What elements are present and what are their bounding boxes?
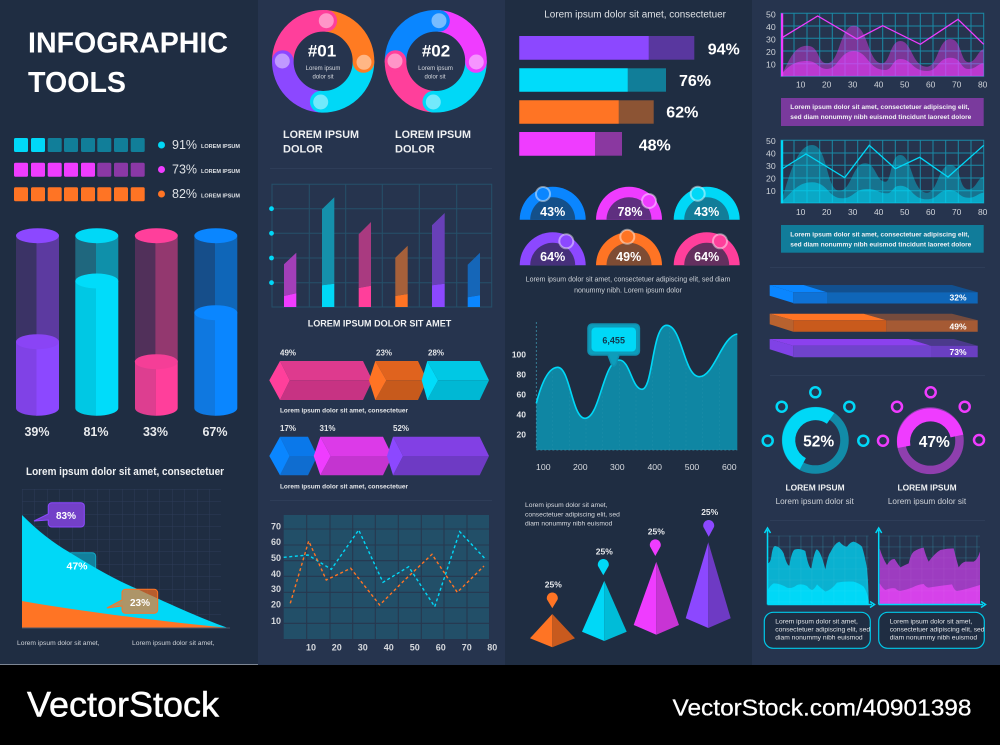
y labels: 30 [766,161,776,171]
panel: donut 52% [763,387,868,506]
pyramid purple: 25% [701,507,719,517]
ring captions: LOREM IPSUM [283,129,359,141]
x labels: 30 [848,80,858,90]
gauge orange 49% [596,230,662,265]
y labels [766,10,776,70]
panel: cyan line chart [766,136,988,217]
orange segment [369,361,427,400]
line [781,16,984,44]
y axis labels: 50 [271,553,281,563]
title: INFOGRAPHIC [28,28,228,60]
back area [781,26,984,76]
cylinder 81%: 81% [83,425,109,439]
bar 48% [519,132,671,156]
x axis labels: 200 [573,462,588,472]
text block: pyramids: consectetuer adipiscing elit, sed [525,511,620,518]
bar 6 [468,253,480,307]
caption: Lorem ipsum dolor sit amet, consectetuer [280,484,409,490]
panel: donut 52%: 52% [803,434,834,451]
gauge cyan 43% [674,187,740,220]
callout 23% [107,589,158,613]
purple segment [387,437,489,475]
banner: teal: sed diam nonummy nibh euismod tincidunt laoreet dolore [790,242,972,248]
gauge caption: Lorem ipsum dolor sit amet, consectetuer adipiscing elit, sed diam [526,277,730,284]
bar 2 [322,197,334,307]
y axis labels: 40 [517,410,526,420]
x labels: 80 [978,80,988,90]
row 91% [14,138,240,152]
callout: left text box: consectetuer adipiscing elit, sed [775,626,870,634]
bar 48%: 48% [639,138,671,155]
cylinder 81% [75,228,118,439]
y labels: 50 [766,10,776,20]
x labels: 60 [926,207,936,217]
x labels: 30 [848,207,858,217]
cylinder 67%: 67% [202,425,228,439]
pink segment [269,361,372,400]
magenta segment [314,437,392,475]
callout: right text box: diam nonummy nibh euismod [890,635,977,642]
caption: Lorem ipsum dolor sit amet, consectetuer [280,408,409,415]
title [28,28,228,99]
x axis labels: 20 [332,643,342,653]
panel: dotted line chart [271,515,497,653]
text block: pyramids [525,502,620,528]
pyramid orange: 25% [545,579,562,589]
panel: square progress rows [14,138,240,201]
banner: purple: sed diam nonummy nibh euismod tincidunt laoreet dolore [790,114,972,121]
row 91%: LOREM IPSUM [201,144,240,150]
panel: hex bars row 2: 52% [393,424,409,433]
pyramid magenta: 25% [648,527,665,537]
y labels: 30 [766,34,776,44]
cylinder 67% [194,228,237,439]
panel: 3D bars [770,285,978,357]
bar blue 32% [770,285,978,304]
pyramid cyan: 25% [596,546,613,556]
x labels: 40 [874,207,884,217]
banner: teal [781,225,984,253]
bar 62%: 62% [666,104,698,121]
gauge blue 43%: 43% [540,205,565,219]
x labels: 80 [978,207,988,217]
y axis labels: 10 [271,616,281,626]
orange area [22,601,228,628]
bar purple 73%: 73% [949,347,967,357]
panel: hex bars row 2 [269,424,489,490]
bar blue 32%: 32% [949,293,967,303]
ring captions [283,129,471,156]
x labels: 10 [796,207,806,217]
callout: left text box [764,612,870,648]
row 73% [14,162,240,177]
x labels: 60 [926,80,936,90]
footnotes: Lorem ipsum dolor sit amet, [17,640,100,647]
panel: pyramids [530,507,731,647]
bar 76% [519,68,711,92]
row 82%: 82% [172,187,197,201]
gauge caption: nonummy nibh. Lorem ipsum dolor [574,288,683,295]
x labels: 70 [952,207,962,217]
callout: left text box: diam nonummy nibh euismod [775,635,863,642]
gauge caption [526,277,730,295]
gauge purple 64%: 64% [540,250,565,264]
bar 1 [284,253,296,307]
x labels: 50 [900,207,910,217]
panel: ring #01: #01 [308,42,336,61]
ring captions: LOREM IPSUM [395,129,471,141]
panel: curve area chart [512,320,737,472]
value callout: 6,455 [602,336,625,346]
bar orange 49%: 49% [949,321,967,331]
y axis labels: 40 [271,569,281,579]
row 82%: LOREM IPSUM [201,193,240,199]
banner: purple: Lorem ipsum dolor sit amet, consectetuer adipiscing elit, [790,104,969,111]
y axis labels: 30 [271,584,281,594]
bar 76%: 76% [679,73,711,90]
panel: donut 47%: LOREM IPSUM [897,483,957,493]
panel: ring #02: dolor sit [424,74,446,80]
footer: image id: VectorStock.com/40901398 [672,695,972,721]
callout 23%: 23% [130,598,150,609]
panel: ring #01: dolor sit [312,74,334,80]
bar purple 73% [770,339,978,357]
footer: brand: VectorStock [27,686,220,725]
ring captions: DOLOR [283,144,323,156]
bar 62% [519,100,698,124]
value callout [588,324,639,366]
x axis labels: 30 [358,643,368,653]
row 91%: 91% [172,138,197,152]
y axis labels: 80 [517,370,526,380]
gauge magenta 78% [596,187,662,220]
x axis labels: 10 [306,643,316,653]
callout: right text box [879,612,985,648]
y labels: 10 [766,186,776,196]
y labels: 20 [766,174,776,184]
callout 47% background [68,553,96,579]
y axis labels: 20 [517,430,526,440]
back area [782,145,984,203]
x axis labels: 60 [436,643,446,653]
x labels: 70 [952,80,962,90]
gauge pink 64% [674,232,740,265]
panel: ring #01 [272,10,374,112]
panel: ring #02: Lorem ipsum [418,66,453,72]
y axis labels: 100 [512,350,526,360]
panel: horizontal bars [519,36,740,156]
panel: ring #02 [385,10,487,112]
gauge cyan 43%: 43% [694,205,719,219]
banner: teal: Lorem ipsum dolor sit amet, consectetuer adipiscing elit, [790,232,969,238]
pyramid cyan [582,546,627,641]
gauge purple 64% [520,232,586,265]
y labels: 40 [766,22,776,32]
callout 83% [34,503,84,527]
orange dotted line [290,541,484,605]
pyramid purple [686,507,731,628]
bar 94%: 94% [708,41,740,58]
cylinder 33%: 33% [143,425,168,439]
y axis labels [512,350,526,440]
chart grid [22,489,221,628]
panel: hex bars row 1: 23% [376,348,392,357]
heading: Lorem ipsum dolor sit amet, consectetuer [26,466,224,478]
y labels: 50 [766,136,776,146]
x labels [796,80,988,90]
panel: donut 52%: LOREM IPSUM [785,483,845,493]
panel: hex bars row 2: 17% [280,424,296,433]
panel: magenta line chart [766,10,988,90]
panel: donut 47%: Lorem ipsum dolor sit [888,497,967,506]
x labels: 20 [822,207,832,217]
front area [781,51,984,76]
callout 83%: 83% [56,511,76,522]
x axis labels: 500 [685,462,699,472]
y labels [766,136,776,196]
x labels: 10 [796,80,806,90]
label 47%: 47% [66,560,88,572]
gauge magenta 78%: 78% [617,205,643,219]
y axis labels: 70 [271,522,281,532]
pyramid orange [530,579,575,647]
panel: hex bars row 2: 31% [320,424,336,433]
gauge orange 49%: 49% [616,250,641,264]
banner: purple [781,98,984,126]
panel: hex bars row 1: 49% [280,348,296,357]
cylinder 39%: 39% [24,425,50,439]
panel: small magenta area chart [876,528,986,608]
x axis labels: 100 [536,462,551,472]
panel: hex bars row 1: 28% [428,348,444,357]
cyan segment [422,361,489,400]
x axis labels: 80 [487,643,497,653]
footnotes [17,640,215,647]
x axis labels [306,643,497,653]
row 73%: 73% [172,162,197,176]
panel: hex bars row 1 [269,348,489,415]
axis dots [269,206,274,285]
text block: pyramids: diam nonummy nibh euismod [525,521,613,528]
callout: right text box: Lorem ipsum dolor sit amet, [890,618,972,625]
x labels: 40 [874,80,884,90]
x axis labels: 70 [462,643,472,653]
panel: half gauges [520,187,740,295]
bar 3 [359,222,371,307]
text block: pyramids: Lorem ipsum dolor sit amet, [525,502,608,509]
y labels: 40 [766,149,776,159]
x axis labels: 40 [384,643,394,653]
x labels [796,207,988,217]
panel: cylinder chart [16,228,237,439]
y labels: 20 [766,47,776,57]
callout: left text box: Lorem ipsum dolor sit amet, [775,618,858,625]
bar 94% [519,36,740,60]
x axis labels: 600 [722,462,737,472]
x axis labels: 400 [647,462,662,472]
footnotes: Lorem ipsum dolor sit amet, [132,640,215,647]
panel: triangle area chart [17,466,230,647]
y axis labels [271,522,281,626]
cylinder 33% [135,228,178,439]
line [782,145,984,178]
caption: LOREM IPSUM DOLOR SIT AMET [308,318,452,328]
bar orange 49% [770,314,978,332]
callout: right text box: consectetuer adipiscing elit, sed [890,626,985,634]
y axis labels: 60 [517,390,526,400]
bar 5 [432,213,445,307]
panel: donut 47%: 47% [919,434,950,451]
title: TOOLS [28,67,126,99]
panel: slanted bar chart [269,184,492,328]
x axis labels: 50 [410,643,420,653]
y labels: 10 [766,60,776,70]
ring captions: DOLOR [395,144,435,156]
cyan dotted line [284,530,485,607]
blue segment [269,437,317,475]
x labels: 20 [822,80,832,90]
panel: small cyan area chart [764,528,874,608]
front area [782,182,984,203]
y axis labels: 60 [271,537,281,547]
panel: ring #02: #02 [422,42,450,61]
gauge blue 43% [520,187,586,220]
heading: horizontal bars: Lorem ipsum dolor sit amet, consectetuer [544,9,727,20]
gauge pink 64%: 64% [694,250,719,264]
cylinder 39% [16,228,59,439]
x labels: 50 [900,80,910,90]
row 73%: LOREM IPSUM [201,169,240,175]
bar 4 [395,246,408,307]
panel: ring #01: Lorem ipsum [306,66,340,72]
cyan area [22,515,228,628]
row 82% [14,187,240,201]
panel: donut 47% [878,387,984,506]
axis [22,627,230,629]
panel: donut 52%: Lorem ipsum dolor sit [776,497,855,506]
y axis labels: 20 [271,600,281,610]
x axis labels [536,462,737,472]
pyramid magenta [634,527,679,635]
x axis labels: 300 [610,462,625,472]
